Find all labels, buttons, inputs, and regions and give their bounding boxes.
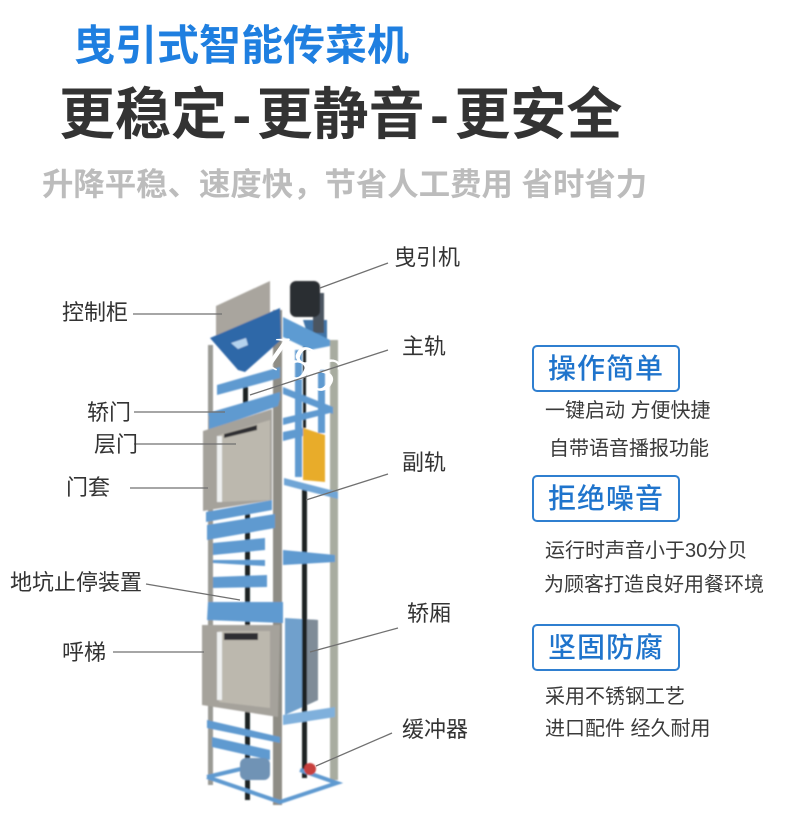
counterweight plate	[303, 428, 325, 482]
text: simple operation line 2: 自带语音播报功能	[549, 438, 709, 460]
text: simple operation line 1: 一键启动 方便快捷	[545, 400, 711, 422]
feature badge: sturdy and corrosion proof: 坚固防腐	[548, 632, 664, 663]
upper landing door	[203, 409, 272, 511]
frame posts	[208, 310, 338, 805]
control cabinet	[216, 281, 270, 345]
label: main rail: 主轨	[402, 334, 446, 359]
text: noise rejection line 2: 为顾客打造良好用餐环境	[544, 574, 764, 596]
label: traction machine: 曳引机	[394, 245, 460, 270]
traction machine	[290, 281, 327, 348]
lower landing door	[202, 625, 280, 717]
title: 曳引式智能传菜机	[73, 22, 409, 69]
top blue hopper	[210, 308, 330, 372]
label: buffer: 缓冲器	[402, 717, 468, 742]
buffer	[304, 763, 316, 775]
label: pit stop device: 地坑止停装置	[10, 570, 142, 595]
car	[283, 600, 335, 778]
machine illustration	[202, 281, 338, 805]
feature badge: sturdy and corrosion proof	[532, 624, 680, 671]
text: sturdy line 1: 采用不锈钢工艺	[545, 686, 685, 708]
label: car: 轿厢	[407, 601, 451, 626]
middle blue crossbars	[206, 500, 335, 623]
label: door frame: 门套	[66, 475, 110, 500]
base frame	[207, 768, 337, 802]
rear rails	[243, 343, 307, 800]
text: sturdy line 2: 进口配件 经久耐用	[545, 718, 711, 740]
label: car door: 轿门	[87, 400, 131, 425]
feature badge: simple operation: 操作简单	[548, 353, 664, 384]
label: control cabinet: 控制柜	[62, 300, 128, 325]
label: landing door: 层门	[94, 432, 138, 457]
bottom blue crossbars	[207, 720, 280, 760]
label: secondary rail: 副轨	[402, 450, 446, 475]
text: noise rejection line 1: 运行时声音小于30分贝	[545, 540, 747, 562]
feature badge: noise rejection: 拒绝噪音	[548, 483, 664, 514]
watermark: 186	[253, 321, 348, 406]
headline: 更稳定-更静音-更安全	[59, 83, 622, 146]
feature badge: noise rejection	[532, 475, 680, 522]
feature badge: simple operation	[532, 345, 680, 392]
subtitle: 升降平稳、速度快，节省人工费用 省时省力	[42, 167, 647, 202]
label: call button: 呼梯	[62, 640, 106, 665]
upper blue rails and braces	[208, 350, 333, 477]
leader lines	[113, 263, 398, 766]
upper shelf	[284, 478, 338, 499]
